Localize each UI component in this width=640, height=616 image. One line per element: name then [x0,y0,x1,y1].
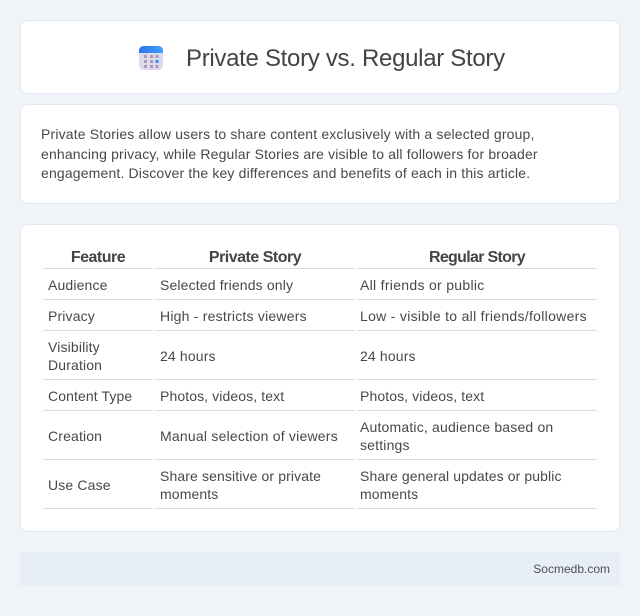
comparison table: 24 hours [360,348,416,364]
comparison table: Regular Story [429,249,525,266]
comparison table: Privacy [48,308,95,324]
comparison table: settings [360,437,410,453]
comparison table: Content Type [48,388,132,404]
comparison table: All friends or public [360,277,485,293]
comparison table [43,249,597,509]
intro paragraph [41,126,538,181]
comparison table: Creation [48,428,102,444]
panel: comparison table card [20,224,620,532]
footer bar [20,552,620,586]
comparison table: Photos, videos, text [360,388,484,404]
comparison table: Private Story [209,249,301,266]
comparison table: moments [360,486,418,502]
footer source text: Socmedb.com [533,562,610,576]
comparison table: Low - visible to all friends/followers [360,308,587,324]
comparison table: 24 hours [160,348,216,364]
comparison table: High - restricts viewers [160,308,307,324]
comparison table: Share sensitive or private [160,468,321,484]
comparison table: Feature [71,249,125,266]
comparison table: Visibility [48,339,100,355]
comparison table: Use Case [48,477,111,493]
comparison table: Audience [48,277,108,293]
comparison table: Share general updates or public [360,468,562,484]
comparison table: Photos, videos, text [160,388,284,404]
panel: intro text card [20,104,620,204]
icon: calendar [139,46,163,70]
comparison table: Manual selection of viewers [160,428,338,444]
comparison table: Duration [48,357,102,373]
title: Private Story vs. Regular Story [186,45,505,72]
comparison table: Selected friends only [160,277,293,293]
panel: title card [20,20,620,94]
comparison table: Automatic, audience based on [360,419,553,435]
intro paragraph: engagement. Discover the key differences and benefits of each in this article. [41,165,530,181]
comparison table: moments [160,486,218,502]
intro paragraph: Private Stories allow users to share content exclusively with a selected group, [41,126,535,142]
intro paragraph: enhancing privacy, while Regular Stories are visible to all followers for broader [41,146,538,162]
